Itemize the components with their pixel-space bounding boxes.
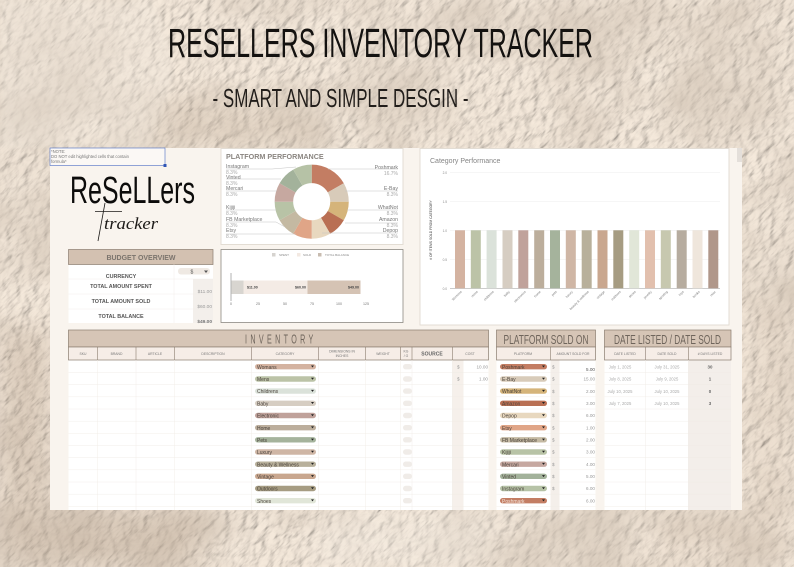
platform pills xyxy=(500,364,547,505)
platform pills: Mercari xyxy=(502,462,519,468)
grid xyxy=(68,360,488,510)
x axis labels: 100 xyxy=(336,302,342,306)
table: date listed / date sold xyxy=(604,330,731,510)
donut labels: 8.3% xyxy=(387,234,399,240)
stacked bar xyxy=(231,273,360,301)
platform pills: Amazon xyxy=(502,401,521,407)
date rows: July 10, 2025 xyxy=(655,389,680,394)
column headers: CATEGORY xyxy=(276,352,295,356)
amounts sold: $ xyxy=(552,486,555,491)
amounts sold: $ xyxy=(552,389,555,394)
donut labels: 8.3% xyxy=(226,211,238,217)
panel: category performance xyxy=(420,148,729,325)
cost values xyxy=(457,364,488,382)
category labels: vintage xyxy=(596,290,606,300)
heading: category performance: Category Performance xyxy=(430,158,501,165)
donut labels: Poshmark xyxy=(375,165,398,171)
date rows: July 10, 2025 xyxy=(608,389,633,394)
amounts sold: 4.00 xyxy=(586,462,595,467)
date rows: July 8, 2025 xyxy=(609,377,632,382)
donut labels: 8.3% xyxy=(226,223,238,229)
platform pills: E-Bay xyxy=(502,377,516,383)
donut labels: 8.3% xyxy=(226,170,238,176)
cost values: 10.00 xyxy=(476,364,488,370)
amounts sold: 3.00 xyxy=(586,401,595,406)
category pills xyxy=(255,364,316,505)
logo: Resellers tracker: ReSeLLers xyxy=(70,170,195,212)
donut labels: Etsy xyxy=(226,228,236,234)
amounts sold: $ xyxy=(552,413,555,418)
currency selector xyxy=(178,268,210,276)
heading: inventory xyxy=(68,330,488,347)
y axis xyxy=(429,171,720,291)
amounts sold: $ xyxy=(552,438,555,443)
panel: budget overview: CURRENCY xyxy=(106,274,137,280)
amounts sold: $ xyxy=(552,462,555,467)
heading: budget overview xyxy=(68,250,213,264)
donut labels: 16.7% xyxy=(384,171,399,177)
stacked bar: $49.00 xyxy=(348,286,359,290)
panel: budget overview: TOTAL BALANCE xyxy=(98,314,144,320)
column headers: WEIGHT xyxy=(376,352,390,356)
x axis labels xyxy=(230,302,369,306)
bars xyxy=(455,230,718,288)
column headers: SOURCE xyxy=(421,352,443,358)
date rows: 30 xyxy=(708,364,713,370)
platform pills: FB Marketplace xyxy=(502,438,537,444)
category labels: sporting xyxy=(658,290,669,301)
y axis: 1.0 xyxy=(443,229,447,233)
category pills: Shoes xyxy=(257,499,272,505)
donut labels: Instagram xyxy=(226,164,249,170)
column headers xyxy=(68,347,488,360)
category pills: Beauty & Wellness xyxy=(257,462,299,468)
platform pills: Kijiji xyxy=(502,450,511,456)
column headers: INCHES xyxy=(336,354,349,358)
column headers: KG xyxy=(404,350,409,354)
x axis labels: 125 xyxy=(363,302,369,306)
amounts sold: 3.00 xyxy=(586,450,595,455)
grid xyxy=(496,372,596,506)
category pills: Outdoors xyxy=(257,487,278,493)
category labels: home xyxy=(533,290,542,298)
donut labels: 8.3% xyxy=(226,192,238,198)
amounts sold: 15.00 xyxy=(584,377,595,382)
column headers: DESCRIPTION xyxy=(201,352,225,356)
amounts sold: 6.00 xyxy=(586,486,595,491)
column headers: DATE SOLD xyxy=(658,352,677,356)
category labels: misc xyxy=(709,290,717,297)
unit selectors xyxy=(403,364,412,503)
category labels: books xyxy=(692,290,701,299)
amounts sold: $ xyxy=(552,377,555,382)
y axis: 1.5 xyxy=(443,200,447,204)
donut labels: 8.3% xyxy=(387,192,399,198)
category pills: Pets xyxy=(257,438,268,444)
category labels: mens xyxy=(470,290,479,298)
amounts sold: $ xyxy=(552,401,555,406)
subtitle: - SMART AND SIMPLE DESGIN - xyxy=(212,83,468,113)
date rows: July 10, 2025 xyxy=(655,401,680,406)
platform pills: WhatNot xyxy=(502,389,522,395)
amounts sold: 2.00 xyxy=(586,438,595,443)
y axis: # OF ITEMS SOLD FROM CATEGORY xyxy=(429,199,433,260)
amounts sold: 1.00 xyxy=(586,425,595,430)
column headers: COST xyxy=(465,352,475,356)
spreadsheet panel xyxy=(50,148,742,510)
heading: platform performance: PLATFORM PERFORMANCE xyxy=(226,152,324,161)
date rows: July 7, 2025 xyxy=(609,401,632,406)
donut labels: 8.3% xyxy=(387,223,399,229)
category labels: Womens xyxy=(451,290,463,302)
donut labels: Kijiji xyxy=(226,205,235,211)
category pills: Mens xyxy=(257,377,270,383)
column headers: / G xyxy=(404,354,409,358)
logo: Resellers tracker xyxy=(70,170,195,241)
category pills: Womans xyxy=(257,365,277,371)
date rows: 3 xyxy=(709,401,712,406)
heading: budget overview: BUDGET OVERVIEW xyxy=(106,255,176,262)
amounts sold: $ xyxy=(552,425,555,430)
category labels: shoes xyxy=(628,290,637,299)
date rows: July 1, 2025 xyxy=(609,364,632,370)
amounts sold: 5.00 xyxy=(586,367,595,372)
category labels: electronics xyxy=(513,290,527,303)
amounts sold: 2.00 xyxy=(586,389,595,394)
category pills: Vintage xyxy=(257,474,274,480)
donut labels: Mercari xyxy=(226,186,243,192)
budget rows xyxy=(68,264,213,323)
column headers: BRAND xyxy=(111,352,123,356)
y axis: 0.5 xyxy=(443,258,447,262)
donut labels: 8.3% xyxy=(226,234,238,240)
panel: budget stacked bar chart xyxy=(221,250,403,322)
amounts sold: $ xyxy=(552,450,555,455)
donut labels xyxy=(226,164,399,240)
platform pills: Poshmark xyxy=(502,499,525,505)
amounts sold xyxy=(552,364,595,503)
category labels xyxy=(451,290,717,311)
x axis labels: 50 xyxy=(283,302,287,306)
note: formula warning xyxy=(50,148,166,167)
x axis labels: 0 xyxy=(230,302,232,306)
amounts sold: 6.00 xyxy=(586,498,595,503)
chart legend: SOLD xyxy=(303,253,312,257)
donut labels: Depop xyxy=(383,228,398,234)
panel: budget overview: $11.00 xyxy=(198,289,212,295)
heading: date listed / date sold xyxy=(604,330,731,347)
category labels: outdoors xyxy=(610,290,622,301)
column headers xyxy=(496,347,596,360)
donut labels: 8.3% xyxy=(387,211,399,217)
note: formula warning: DO NOT edit highlighted cells that contain xyxy=(51,154,130,159)
date rows xyxy=(608,364,713,406)
note: formula warning: *NOTE: xyxy=(51,149,65,154)
category labels: toys xyxy=(678,290,685,297)
chart legend: SPENT xyxy=(279,253,289,257)
category pills: Childrens xyxy=(257,389,279,395)
date rows: July 31, 2025 xyxy=(655,364,680,370)
table: platform sold on xyxy=(496,330,596,510)
category labels: jewelry xyxy=(642,290,653,300)
column headers: # DAYS LISTED xyxy=(698,352,723,356)
category pills: Electronic xyxy=(257,414,279,420)
platform pills: Instagram xyxy=(502,487,524,493)
platform pills: Vinted xyxy=(502,474,516,480)
category labels: pets xyxy=(551,290,558,297)
column headers: SKU xyxy=(80,352,87,356)
donut labels: E-Bay xyxy=(384,186,398,192)
amounts sold: 6.00 xyxy=(586,413,595,418)
category labels: childrens xyxy=(483,290,495,302)
category labels: luxury xyxy=(565,290,574,299)
x axis labels: 75 xyxy=(310,302,314,306)
panel: budget overview: $60.00 xyxy=(197,304,212,310)
panel: budget overview: TOTAL AMOUNT SPENT xyxy=(90,284,153,290)
column headers: PLATFORM xyxy=(514,352,532,356)
cost values: 1.00 xyxy=(479,377,488,382)
grid xyxy=(604,360,731,510)
category pills: Home xyxy=(257,426,271,432)
donut labels: Amazon xyxy=(379,217,398,223)
date rows: July 9, 2025 xyxy=(656,377,679,382)
table: inventory xyxy=(68,330,488,510)
amounts sold: $ xyxy=(552,474,555,479)
panel: budget overview: TOTAL AMOUNT SOLD xyxy=(92,299,151,305)
heading: date listed / date sold: DATE LISTED / DATE SOLD xyxy=(614,332,721,347)
platform pills: Depop xyxy=(502,414,517,420)
panel: budget overview xyxy=(68,250,213,325)
stacked bar: $11.00 xyxy=(247,286,258,290)
platform pills: Poshmark xyxy=(502,365,525,371)
date rows: 0 xyxy=(709,389,712,394)
amounts sold: $ xyxy=(552,364,555,370)
donut labels: Vinted xyxy=(226,175,241,181)
column headers: DIMENSIONS IN xyxy=(329,350,355,354)
panel: budget overview: $49.00 xyxy=(197,319,212,325)
x axis labels: 25 xyxy=(256,302,260,306)
logo: Resellers tracker: tracker xyxy=(104,214,158,233)
y axis: 2.0 xyxy=(443,171,447,175)
donut labels: WhatNot xyxy=(378,205,399,211)
donut labels: 8.3% xyxy=(226,181,238,187)
note: formula warning: formula* xyxy=(51,159,67,164)
platform pills: Etsy xyxy=(502,426,512,432)
category pills: Luxury xyxy=(257,450,273,456)
heading: inventory: INVENTORY xyxy=(245,334,317,347)
y axis: 0.0 xyxy=(443,287,447,291)
date rows: 1 xyxy=(709,377,712,382)
category labels: beauty & wellness xyxy=(569,290,590,311)
panel: platform performance xyxy=(221,148,403,244)
amounts sold: 5.00 xyxy=(586,474,595,479)
column headers xyxy=(604,347,731,360)
donut leader lines xyxy=(226,167,398,234)
donut labels: FB Marketplace xyxy=(226,217,262,223)
cost values: $ xyxy=(457,364,460,370)
column headers: AMOUNT SOLD FOR xyxy=(557,352,590,356)
stacked bar: $60.00 xyxy=(295,286,306,290)
category labels: baby xyxy=(503,290,511,298)
donut chart xyxy=(284,174,340,229)
chart legend: TOTAL BALANCE xyxy=(325,253,349,257)
currency selector: $ xyxy=(190,270,194,276)
column headers: ARTICLE xyxy=(148,352,163,356)
category pills: Baby xyxy=(257,401,269,407)
cost values: $ xyxy=(457,377,460,382)
column headers: DATE LISTED xyxy=(614,352,636,356)
chart legend xyxy=(272,253,349,257)
heading: platform sold on: PLATFORM SOLD ON xyxy=(504,332,588,347)
heading: platform sold on xyxy=(496,330,596,347)
